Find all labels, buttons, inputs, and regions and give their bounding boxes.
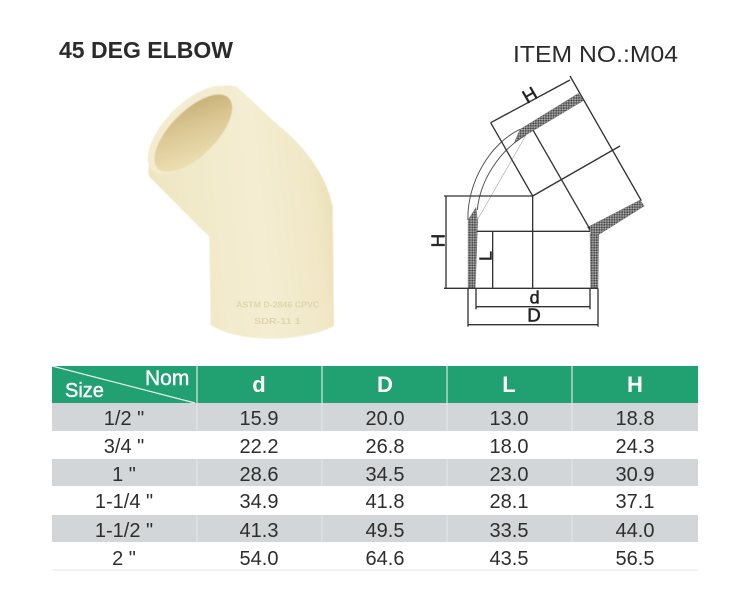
row 1/2: 18.8	[616, 408, 654, 430]
row 1-1/4: 37.1	[616, 491, 654, 513]
row 1/2: 20.0	[366, 408, 404, 430]
d dimension	[474, 288, 478, 309]
item number: ITEM NO.:M04	[513, 41, 678, 67]
table header: L	[502, 372, 516, 397]
row 1-1/4	[95, 491, 654, 513]
row 1/2: 13.0	[490, 408, 528, 430]
table header: Nom	[145, 367, 189, 390]
row 1/2	[104, 408, 654, 430]
row 1/2: 1/2 "	[104, 408, 144, 430]
embossed marking on elbow: ASTM D-2846 CPVC	[236, 299, 319, 309]
L dimension	[491, 231, 495, 288]
embossed marking on elbow	[236, 299, 319, 326]
row 3/4: 18.0	[490, 436, 528, 458]
row 1-1/2: 41.3	[240, 520, 278, 542]
dimension labels: D	[527, 305, 541, 326]
row 1: 23.0	[490, 464, 528, 486]
table header: Size	[65, 380, 104, 402]
title: 45 DEG ELBOW	[59, 37, 233, 63]
row 2: 2 "	[112, 548, 136, 570]
row 1: 28.6	[240, 464, 278, 486]
table header: D	[377, 372, 393, 397]
technical drawing: elbow cross-section	[428, 76, 644, 327]
row 3/4: 26.8	[366, 436, 404, 458]
table header: d	[252, 372, 266, 397]
row 1: 30.9	[616, 464, 654, 486]
row 1-1/4: 1-1/4 "	[95, 491, 153, 513]
row 3/4: 3/4 "	[104, 436, 144, 458]
left H dimension	[444, 196, 448, 288]
row 2: 43.5	[490, 548, 528, 570]
row 1-1/2	[95, 520, 654, 542]
table rows	[95, 408, 654, 570]
hatched wall sections	[468, 93, 644, 289]
row 1-1/4: 41.8	[366, 491, 404, 513]
dimension labels: H	[428, 234, 449, 247]
elbow outlines	[468, 129, 520, 220]
row 2: 56.5	[616, 548, 654, 570]
row 1	[112, 464, 654, 486]
dimension labels: d	[530, 287, 540, 307]
row 1-1/2: 49.5	[366, 520, 404, 542]
row 2: 64.6	[366, 548, 404, 570]
embossed marking on elbow: SDR-11 1	[254, 316, 301, 326]
row 2: 54.0	[240, 548, 278, 570]
row 3/4: 24.3	[616, 436, 654, 458]
dimension labels: L	[475, 251, 495, 261]
row 2	[112, 548, 654, 570]
row 3/4: 22.2	[240, 436, 278, 458]
row 1: 34.5	[366, 464, 404, 486]
row 1/2: 15.9	[240, 408, 278, 430]
row 1: 1 "	[112, 464, 136, 486]
photo: CPVC 45 degree elbow	[133, 71, 334, 339]
top H dimension	[491, 80, 570, 123]
D dimension	[466, 288, 470, 327]
row backgrounds	[52, 403, 698, 542]
row 1-1/4: 28.1	[490, 491, 528, 513]
row 3/4	[104, 436, 654, 458]
dimension labels	[428, 82, 541, 326]
specification table	[52, 366, 698, 570]
row 1-1/4: 34.9	[240, 491, 278, 513]
row 1-1/2: 1-1/2 "	[95, 520, 153, 542]
table header: H	[627, 372, 643, 397]
table header	[52, 366, 698, 403]
row 1-1/2: 44.0	[616, 520, 654, 542]
row 1-1/2: 33.5	[490, 520, 528, 542]
dimension labels: H	[519, 82, 541, 107]
